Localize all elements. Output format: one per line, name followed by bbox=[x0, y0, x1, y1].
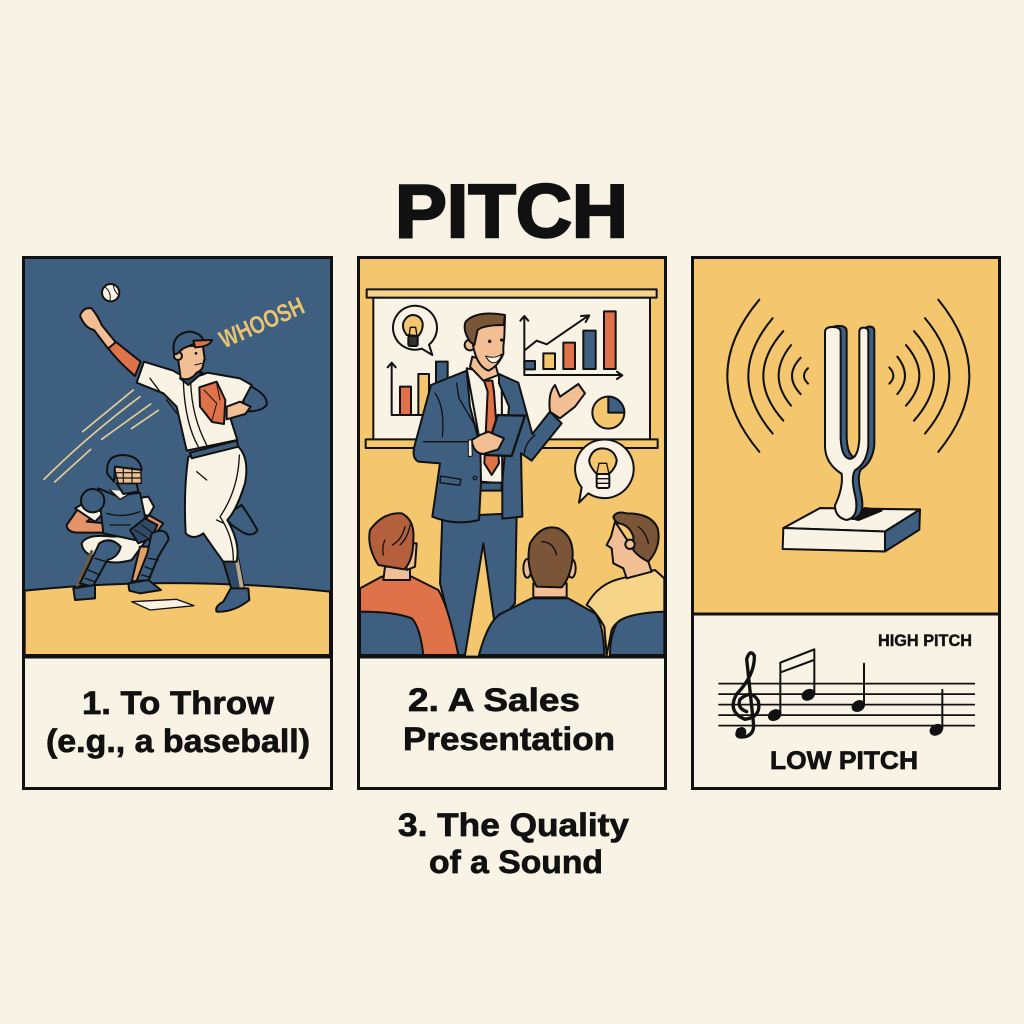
panel 2: sales presentation bbox=[358, 257, 666, 788]
catcher bbox=[67, 455, 169, 600]
pitcher bbox=[80, 308, 267, 612]
caption 3: of a Sound bbox=[429, 844, 603, 880]
notes bbox=[737, 649, 945, 738]
jacket right side bbox=[499, 374, 562, 519]
sound waves bbox=[727, 300, 969, 452]
fork bbox=[825, 326, 874, 520]
illustration: tuning fork bbox=[693, 257, 1000, 615]
caption 3 bbox=[398, 807, 629, 880]
caption 1 bbox=[46, 685, 310, 759]
panel 3: quality of a sound bbox=[692, 257, 1000, 788]
caption 2 bbox=[403, 682, 615, 757]
whiteboard bbox=[366, 289, 658, 448]
caption 1: 1. To Throw bbox=[82, 685, 274, 721]
baseball bbox=[102, 284, 119, 301]
low pitch label: LOW PITCH bbox=[770, 747, 918, 775]
high pitch label: HIGH PITCH bbox=[878, 632, 972, 650]
illustration: pitcher and catcher bbox=[23, 257, 330, 655]
caption 3: 3. The Quality bbox=[398, 807, 629, 843]
presenter bbox=[414, 313, 585, 655]
music staff bbox=[719, 649, 974, 738]
base bbox=[783, 508, 920, 551]
panel 1: to throw bbox=[23, 257, 332, 788]
right bar chart bbox=[520, 311, 622, 379]
audience bbox=[360, 513, 664, 655]
pie chart bbox=[592, 397, 624, 429]
bulb bubble small bbox=[393, 306, 437, 355]
caption 1: (e.g., a baseball) bbox=[46, 723, 310, 759]
title: PITCH bbox=[395, 169, 628, 253]
treble clef bbox=[733, 653, 759, 737]
left bar chart bbox=[388, 362, 448, 415]
caption 2: Presentation bbox=[403, 721, 615, 757]
speed lines bbox=[44, 390, 158, 482]
bulb bubble large bbox=[575, 439, 634, 503]
caption 2: 2. A Sales bbox=[408, 682, 580, 718]
illustration: presenter and audience bbox=[358, 257, 665, 655]
jacket left side bbox=[414, 371, 481, 522]
whoosh sound word: WHOOSH bbox=[215, 293, 309, 354]
